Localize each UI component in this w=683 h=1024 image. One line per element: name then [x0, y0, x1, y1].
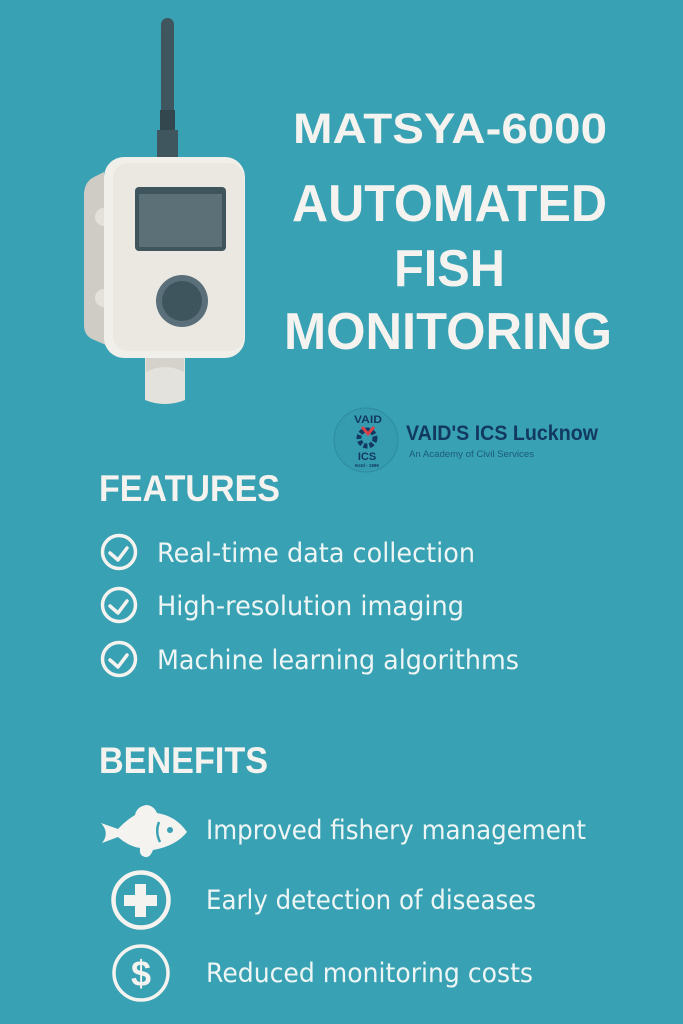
benefit: improved fishery management — [101, 805, 586, 857]
heading: benefits: BENEFITS — [99, 740, 268, 781]
heading: features: FEATURES — [99, 468, 280, 509]
benefits list — [101, 805, 586, 1000]
icon: dollar: $ — [131, 953, 151, 994]
title: AUTOMATED — [292, 175, 607, 233]
camera button — [156, 275, 208, 327]
title: MONITORING — [284, 303, 612, 361]
benefit: early detection of diseases: Early detection of diseases — [206, 885, 536, 916]
feature: machine learning algorithms: Machine learning algorithms — [157, 645, 519, 676]
logo: VAID'S ICS Lucknow — [334, 408, 599, 472]
benefit: reduced monitoring costs — [114, 946, 533, 1000]
logo: VAID'S ICS Lucknow: Estd - 1999 — [355, 463, 379, 468]
title: FISH — [394, 240, 505, 298]
feature: real-time data collection: Real-time data collection — [157, 538, 475, 569]
icon: medical plus — [114, 872, 168, 928]
device body — [104, 157, 245, 358]
title: MATSYA-6000 — [293, 105, 607, 153]
logo: VAID'S ICS Lucknow: ICS — [358, 451, 376, 463]
features list — [102, 536, 519, 676]
device side housing — [84, 172, 106, 345]
logo: VAID'S ICS Lucknow: VAID — [354, 414, 382, 426]
side clips — [95, 208, 113, 307]
bottom tube — [145, 355, 185, 404]
screen — [135, 187, 226, 251]
device face — [113, 163, 244, 351]
benefit: early detection of diseases — [114, 872, 536, 928]
logo: VAID'S ICS Lucknow: An Academy of Civil Services — [409, 449, 535, 459]
benefit: improved fishery management: Improved fishery management — [206, 815, 586, 846]
icon: monitoring device — [84, 18, 245, 404]
benefit: reduced monitoring costs: Reduced monitoring costs — [206, 958, 533, 989]
title — [284, 105, 612, 361]
feature: high-resolution imaging: High-resolution imaging — [157, 591, 464, 622]
logo: VAID'S ICS Lucknow: VAID'S ICS Lucknow — [406, 422, 599, 445]
icon: dollar — [114, 946, 168, 1000]
logo emblem — [359, 427, 375, 446]
icon: fish — [101, 805, 187, 857]
antenna — [157, 18, 178, 160]
